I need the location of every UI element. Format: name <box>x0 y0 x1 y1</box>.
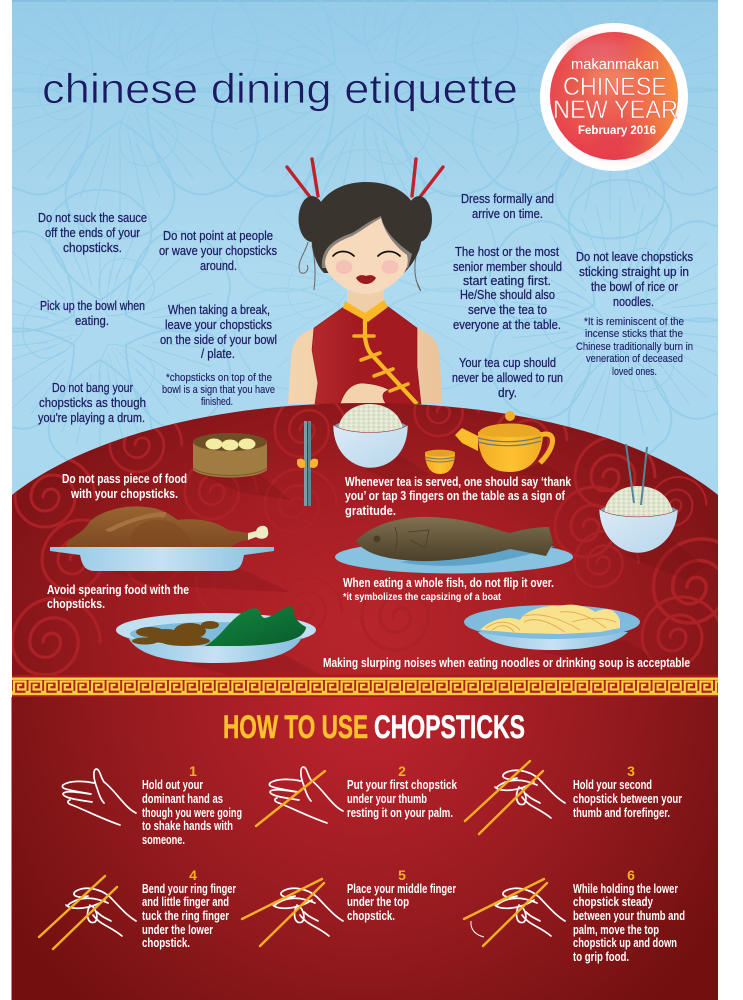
title: chinese dining etiquette <box>42 65 518 112</box>
step 6: While holding the lower <box>573 882 678 896</box>
step 3: chopstick between your <box>573 792 682 806</box>
note: incense sticks: loved ones. <box>612 366 657 378</box>
text: your tea cup: Your tea cup should <box>459 355 556 370</box>
step 4: tuck the ring finger <box>142 909 229 923</box>
step 2: Put your first chopstick <box>347 778 457 792</box>
text: the host: serve the tea to <box>468 302 547 317</box>
note: incense sticks: *It is reminiscent of the <box>584 316 684 328</box>
step 6: between your thumb and <box>573 909 685 923</box>
text: dress formally: arrive on time. <box>472 206 543 221</box>
text: avoid spearing: Avoid spearing food with the <box>47 582 189 597</box>
step 5 <box>242 867 456 946</box>
text: when taking a break <box>160 302 277 361</box>
tea cup <box>425 450 455 474</box>
text: avoid spearing <box>47 582 189 611</box>
rice bowl with chopsticks <box>599 444 705 580</box>
arms <box>288 328 442 404</box>
text: do not suck the sauce: chopsticks. <box>63 240 122 255</box>
note: chopsticks on top of bowl <box>162 372 275 408</box>
face <box>325 218 408 294</box>
teapot <box>455 411 570 480</box>
note: incense sticks: incense sticks that the <box>585 328 683 340</box>
text: do not pass food <box>62 471 187 501</box>
text: your tea cup: never be allowed to run <box>452 370 563 385</box>
text: whenever tea is served: you’ or tap 3 fingers on the table as a sign of <box>345 488 566 503</box>
text: the host: start eating first. <box>463 273 551 288</box>
text: dress formally <box>461 191 554 221</box>
note: incense sticks: veneration of deceased <box>586 353 683 365</box>
dim sum basket <box>193 433 290 500</box>
text: whole fish <box>343 575 554 603</box>
badge: Chinese New Year <box>540 23 688 171</box>
text: do not point: around. <box>200 258 237 273</box>
step 6: chopstick steady <box>573 895 653 909</box>
fish on plate <box>335 517 573 574</box>
step 6: chopstick up and down <box>573 936 677 950</box>
step 5: under the top <box>347 895 409 909</box>
step 6: 6 <box>627 867 635 883</box>
cheongsam placket <box>365 317 417 404</box>
step 3: 3 <box>627 763 635 779</box>
text: whenever tea is served: gratitude. <box>345 503 396 518</box>
text: do not bang: Do not bang your <box>52 380 134 395</box>
step 4: 4 <box>189 867 197 883</box>
neck <box>347 285 384 316</box>
badge: Chinese New Year: makanmakan <box>571 56 659 73</box>
text: the host <box>453 244 562 332</box>
step 1: though you were going <box>142 806 242 820</box>
step 1 <box>62 763 242 847</box>
panel: sky with peony pattern <box>0 0 743 500</box>
hairline shading <box>322 216 412 268</box>
text: the host: He/She should also <box>460 287 555 302</box>
note: chopsticks on top of bowl: finished. <box>201 396 233 408</box>
step 3: Hold your second <box>573 778 652 792</box>
lips <box>356 275 376 284</box>
step 4 <box>39 867 236 950</box>
text: do not point: Do not point at people <box>163 228 273 243</box>
step 2: 2 <box>398 763 406 779</box>
text: the host: everyone at the table. <box>453 317 561 332</box>
text: do not leave chopsticks: the bowl of rice or <box>591 279 679 294</box>
table swirl pattern <box>12 380 743 675</box>
decorative key border <box>12 675 718 697</box>
step 6: to grip food. <box>573 950 629 964</box>
text: pick up the bowl: eating. <box>75 313 109 328</box>
step 5: 5 <box>398 867 406 883</box>
note: chopsticks on top of bowl: *chopsticks on top of the <box>166 372 272 384</box>
text: the host: senior member should <box>453 259 562 274</box>
heading: how to use chopsticks <box>223 709 525 745</box>
hair <box>311 182 422 273</box>
step 3 <box>465 761 682 834</box>
step 6: palm, move the top <box>573 923 659 937</box>
text: do not bang <box>38 380 146 425</box>
step 2: under your thumb <box>347 792 427 806</box>
icon: hair sticks <box>287 159 443 197</box>
text: avoid spearing: chopsticks. <box>47 596 105 611</box>
step 1: 1 <box>189 763 197 779</box>
text: your tea cup <box>452 355 563 400</box>
step 4: Bend your ring finger <box>142 882 236 896</box>
text: your tea cup: dry. <box>498 385 517 400</box>
text: dress formally: Dress formally and <box>461 191 554 206</box>
loose hair strands <box>299 242 421 291</box>
frog buttons <box>354 336 408 391</box>
badge: Chinese New Year: CHINESE <box>563 73 667 101</box>
badge: Chinese New Year: February 2016 <box>578 125 656 137</box>
step 4: and little finger and <box>142 895 229 909</box>
text: do not leave chopsticks: Do not leave chopsticks <box>576 249 693 264</box>
step 1: Hold out your <box>142 778 203 792</box>
step 1: dominant hand as <box>142 792 223 806</box>
text: do not leave chopsticks: sticking straight up in <box>579 264 689 279</box>
woman in cheongsam <box>287 159 443 404</box>
heading: how to use chopsticks: HOW TO USE <box>223 709 368 745</box>
step 1: someone. <box>142 833 185 847</box>
heading: how to use chopsticks: CHOPSTICKS <box>374 709 525 745</box>
step 3: thumb and forefinger. <box>573 806 670 820</box>
text: do not bang: chopsticks as though <box>39 395 146 410</box>
greens and mushrooms on plate <box>116 606 330 680</box>
step 5: chopstick. <box>347 909 395 923</box>
text: the host: The host or the most <box>455 244 559 259</box>
note: incense sticks <box>576 316 693 378</box>
step 6 <box>464 867 685 964</box>
text: pick up the bowl: Pick up the bowl when <box>40 298 145 313</box>
text: do not bang: you're playing a drum. <box>38 410 145 425</box>
cheeks <box>336 260 398 274</box>
hair buns <box>298 196 432 242</box>
text: do not point: or wave your chopsticks <box>159 243 277 258</box>
step 4: chopstick. <box>142 936 190 950</box>
text: do not pass food: with your chopsticks. <box>70 486 178 501</box>
collar <box>343 300 388 322</box>
text: whenever tea is served <box>345 474 572 518</box>
chopsticks on rest <box>297 421 318 506</box>
noodles on plate <box>464 605 670 668</box>
panel: how to use chopsticks <box>12 697 718 1000</box>
dress <box>312 306 421 404</box>
text: when taking a break: When taking a break, <box>168 302 270 317</box>
text: when taking a break: leave your chopsticks <box>165 317 272 332</box>
text: pick up the bowl <box>40 298 145 328</box>
step 5: Place your middle finger <box>347 882 456 896</box>
text: do not leave chopsticks <box>576 249 693 309</box>
text: do not suck the sauce: Do not suck the sauce <box>38 210 147 225</box>
eyes <box>333 252 400 256</box>
text: do not point <box>159 228 277 273</box>
note: incense sticks: Chinese traditionally burn in <box>576 341 693 353</box>
step 1: to shake hands with <box>142 819 233 833</box>
text: whole fish: When eating a whole fish, do not flip it over. <box>343 575 554 590</box>
note: chopsticks on top of bowl: bowl is a sign that you have <box>162 384 275 396</box>
step 2: resting it on your palm. <box>347 806 453 820</box>
hand <box>340 383 389 404</box>
panel: table top <box>12 403 718 675</box>
text: do not pass food: Do not pass piece of food <box>62 471 187 486</box>
text: do not suck the sauce: off the ends of your <box>45 225 141 240</box>
step 2 <box>256 763 457 826</box>
step 4: under the lower <box>142 923 213 937</box>
text: whenever tea is served: Whenever tea is served, one should say ‘thank <box>345 474 572 489</box>
text: whole fish: *it symbolizes the capsizing of a boat <box>343 591 501 603</box>
text: do not suck the sauce <box>38 210 147 255</box>
roast duck on plate <box>50 506 290 592</box>
badge: Chinese New Year: NEW YEAR <box>553 96 678 124</box>
text: do not leave chopsticks: noodles. <box>613 294 654 309</box>
rice bowl: centre <box>333 404 430 482</box>
text: when taking a break: on the side of your bowl <box>160 332 277 347</box>
text: when taking a break: / plate. <box>201 346 235 361</box>
